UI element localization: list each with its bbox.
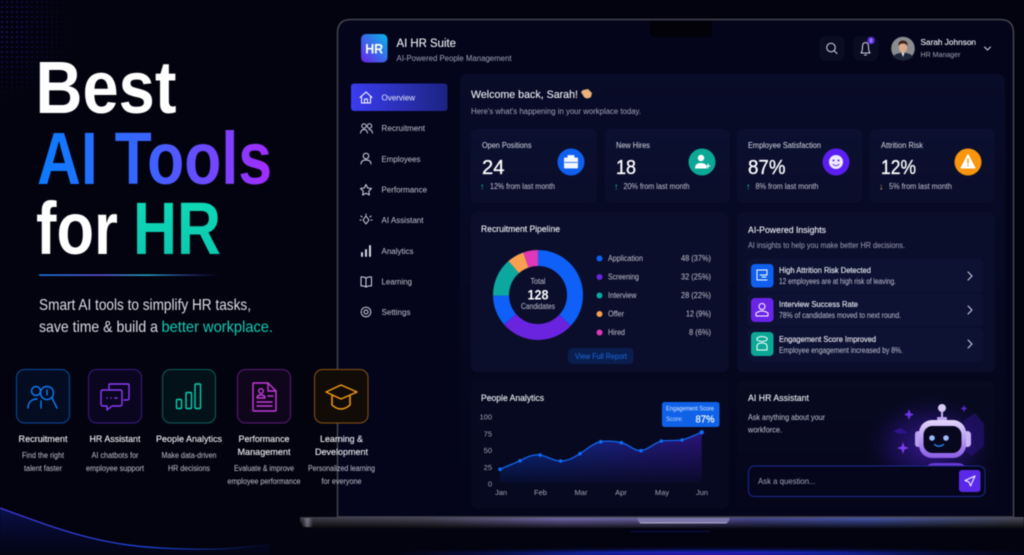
nav: Employees: Employees — [382, 155, 420, 164]
feature: HR Assistant — [86, 370, 145, 473]
laptop base — [300, 517, 1024, 532]
icon: robot — [893, 404, 984, 466]
card: Attrition Risk: Attrition Risk — [881, 141, 924, 150]
subtitle: better workplace. — [162, 319, 273, 336]
callout: Engagement Score: Score: — [666, 417, 683, 423]
bottom glow — [400, 540, 1024, 555]
line chart: May — [655, 488, 669, 497]
welcome heading: Welcome back, Sarah! — [471, 89, 578, 101]
user name: Sarah Johnson — [920, 38, 976, 47]
nav: Settings — [361, 307, 410, 317]
nav: Learning — [361, 277, 412, 287]
line chart: 75 — [484, 430, 492, 438]
legend: 32 (25%) — [681, 272, 711, 282]
line chart: Apr — [615, 488, 627, 497]
button: View Full Report — [568, 348, 634, 364]
nav: Settings: Settings — [382, 308, 410, 317]
card: New Hires: ↑ — [614, 182, 618, 192]
nav: Recruitment — [360, 124, 426, 133]
label: Recruitment — [18, 434, 68, 473]
card: New Hires: 20% from last month — [624, 182, 690, 191]
user avatar — [891, 37, 915, 60]
icon: graduation cap — [314, 370, 368, 423]
nav: Analytics: Analytics — [382, 247, 414, 256]
legend: Interview — [608, 291, 637, 300]
panel: Recruitment Pipeline — [471, 212, 728, 372]
label: HR Assistant — [86, 434, 145, 473]
panel: People Analytics: People Analytics — [481, 393, 544, 403]
icon: bar chart — [162, 370, 216, 423]
donut chart: Total — [530, 277, 546, 286]
nav: Performance — [360, 184, 428, 195]
notification bell — [853, 36, 878, 61]
card: Attrition Risk: ↓ — [879, 182, 884, 192]
user name: HR Manager — [920, 50, 961, 59]
main panel — [460, 74, 1005, 510]
donut chart — [486, 243, 590, 347]
label: Performance Management: employee performance — [228, 477, 301, 486]
panel: People Analytics — [480, 394, 720, 498]
legend: 48 (37%) — [681, 254, 711, 263]
legend: 28 (22%) — [681, 291, 711, 300]
line chart: 0 — [488, 480, 492, 488]
line chart: 25 — [484, 463, 492, 472]
label: HR Assistant: HR Assistant — [90, 434, 141, 444]
insight: Interview Success Rate — [747, 293, 984, 327]
label: Recruitment: Find the right — [22, 451, 65, 460]
laptop screen — [338, 20, 1014, 517]
panel: AI-Powered Insights: AI-Powered Insights — [748, 225, 826, 235]
logo — [361, 34, 388, 62]
subtitle — [39, 297, 273, 336]
panel: AI HR Assistant: workforce. — [747, 426, 782, 434]
title — [36, 46, 272, 270]
label: Learning & Development: Learning & — [320, 434, 363, 444]
card: Employee Satisfaction — [737, 129, 862, 203]
card: Open Positions: 12% from last month — [490, 182, 555, 191]
label: People Analytics: People Analytics — [156, 434, 222, 444]
panel: AI-Powered Insights — [737, 212, 994, 372]
card: Open Positions: Open Positions — [482, 141, 532, 150]
feature: Performance Management — [228, 370, 301, 486]
card: Employee Satisfaction: 8% from last month — [756, 182, 818, 191]
feature: Learning & Development — [308, 370, 375, 486]
panel: AI HR Assistant: AI HR Assistant — [748, 393, 809, 403]
label: Recruitment: talent faster — [24, 464, 62, 473]
nav: Performance: Performance — [382, 186, 428, 194]
welcome heading: Here's what's happening in your workplace today. — [471, 107, 641, 116]
nav: Analytics — [362, 246, 414, 256]
legend: 8 (6%) — [689, 328, 711, 337]
label: Recruitment: Recruitment — [18, 434, 68, 444]
line chart — [479, 412, 708, 497]
icon: document — [238, 370, 290, 423]
insight: Engagement Score Improved — [747, 328, 984, 362]
panel: Recruitment Pipeline: Recruitment Pipeline — [481, 224, 560, 234]
insight: Interview Success Rate: 78% of candidates moved to next round. — [779, 311, 901, 320]
line chart: Jun — [696, 488, 708, 497]
nav: AI Assistant — [360, 214, 424, 225]
card: New Hires — [605, 129, 730, 203]
subtitle: save time & build a — [39, 319, 158, 336]
insight: Engagement Score Improved: Employee engagement increased by 8%. — [779, 346, 903, 355]
icon: briefcase — [558, 148, 584, 176]
label: Learning & Development: Personalized learning — [308, 464, 375, 473]
app name: AI HR Suite — [396, 38, 456, 50]
label: Performance Management: Evaluate & improve — [234, 464, 294, 473]
icon: chat bubbles — [88, 370, 142, 423]
icon: recruitment — [16, 370, 70, 423]
label: HR Assistant: employee support — [86, 464, 145, 473]
insight: Engagement Score Improved: Engagement Score Improved — [779, 335, 876, 344]
feature: People Analytics — [156, 370, 222, 473]
card: Employee Satisfaction: ↑ — [746, 182, 750, 192]
button: send — [959, 470, 980, 492]
app name — [396, 38, 512, 63]
label: People Analytics: HR decisions — [168, 464, 210, 473]
line chart: Feb — [534, 488, 547, 497]
robot glow — [864, 395, 996, 495]
insight: High Attrition Risk Detected: 12 employees are at high risk of leaving. — [779, 277, 896, 286]
card: Open Positions: 24 — [482, 157, 504, 179]
line chart: Jan — [495, 488, 507, 497]
button: View Full Report: View Full Report — [575, 352, 628, 361]
label: Performance Management — [228, 434, 301, 486]
label: People Analytics: Make data-driven — [162, 451, 216, 460]
title rule — [39, 274, 220, 276]
input: Ask a question — [748, 466, 985, 496]
legend: 12 (9%) — [686, 310, 711, 318]
card: New Hires: 18 — [616, 157, 636, 179]
chevron — [984, 47, 990, 50]
app header — [361, 34, 990, 63]
camera notch — [650, 21, 712, 37]
label: Learning & Development: for everyone — [322, 477, 362, 486]
title: Best — [36, 46, 176, 129]
nav: Recruitment: Recruitment — [382, 124, 426, 133]
callout: Engagement Score: 87% — [696, 414, 715, 426]
app name: AI-Powered People Management — [396, 54, 512, 63]
panel: AI HR Assistant: Ask anything about your — [748, 413, 825, 422]
card: Attrition Risk: 12% — [881, 157, 916, 179]
title: AI Tools — [37, 117, 272, 200]
nav: Employees — [361, 153, 420, 164]
insight: High Attrition Risk Detected — [747, 258, 984, 292]
panel: AI-Powered Insights: AI insights to help you make better HR decisions. — [748, 241, 905, 250]
label: People Analytics — [156, 434, 222, 473]
search button — [819, 36, 845, 61]
line chart: 100 — [479, 412, 492, 422]
label: Performance Management: Management — [238, 447, 291, 457]
card: Attrition Risk — [870, 129, 994, 203]
donut chart: Candidates — [521, 302, 555, 311]
legend: Offer — [608, 310, 624, 318]
line chart: Mar — [575, 488, 588, 497]
icon: warning — [954, 148, 982, 176]
icon: waving hand — [581, 89, 592, 98]
nav active: Overview — [351, 84, 448, 111]
panel: AI HR Assistant — [737, 381, 996, 508]
legend — [596, 254, 711, 337]
icon: add user — [688, 148, 716, 176]
icon: smiley — [822, 148, 850, 176]
label: Performance Management: Performance — [238, 434, 290, 444]
card: Employee Satisfaction: Employee Satisfaction — [748, 141, 821, 150]
legend: Screening — [608, 272, 639, 282]
label: Learning & Development — [308, 434, 375, 486]
insight: High Attrition Risk Detected: High Attrition Risk Detected — [779, 266, 871, 275]
insight: Interview Success Rate: Interview Success Rate — [779, 300, 859, 309]
feature: Recruitment — [16, 370, 70, 473]
laptop — [300, 20, 1024, 532]
nav: Learning: Learning — [382, 278, 412, 286]
user name — [920, 38, 976, 59]
card: Open Positions — [471, 129, 596, 203]
dotted pattern: top left — [0, 0, 67, 93]
title: HR — [133, 187, 221, 270]
input: Ask a question: Ask a question... — [758, 476, 816, 486]
wave: bottom left — [0, 508, 270, 555]
legend: Application — [608, 254, 643, 263]
card: New Hires: New Hires — [616, 141, 650, 150]
notification bell: 8 — [870, 38, 873, 44]
legend: Hired — [608, 328, 625, 337]
nav active: Overview: Overview — [382, 94, 415, 102]
logo: HR — [365, 40, 383, 56]
card: Attrition Risk: 5% from last month — [889, 182, 952, 191]
card: Open Positions: ↑ — [480, 182, 484, 192]
line chart: 50 — [484, 446, 492, 455]
donut chart: 128 — [528, 286, 549, 302]
welcome heading — [471, 89, 641, 116]
label: Learning & Development: Development — [315, 447, 368, 457]
callout: Engagement Score — [662, 402, 720, 427]
sidebar — [351, 84, 448, 317]
title: for — [36, 187, 118, 270]
nav: AI Assistant: AI Assistant — [382, 216, 424, 225]
card: Employee Satisfaction: 87% — [748, 157, 786, 179]
label: HR Assistant: AI chatbots for — [92, 451, 139, 460]
callout: Engagement Score: Engagement Score — [666, 406, 715, 412]
subtitle: Smart AI tools to simplify HR tasks, — [39, 297, 251, 314]
